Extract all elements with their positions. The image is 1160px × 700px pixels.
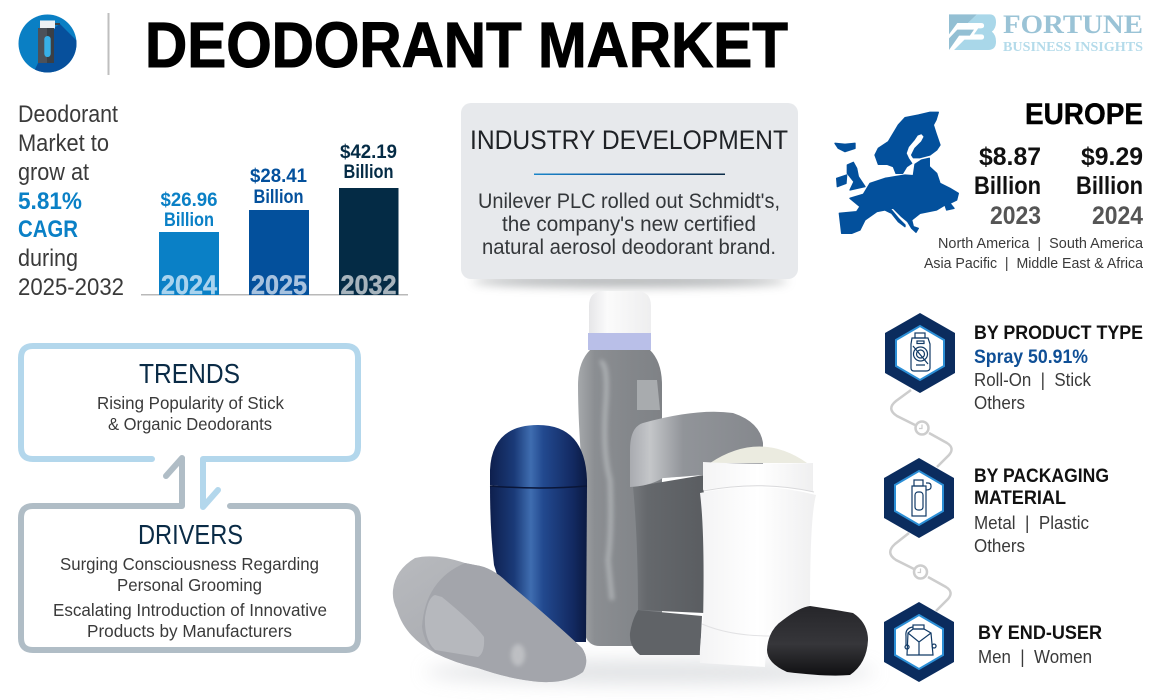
Europe 2024 value: 2024 [1092,202,1143,230]
grey lying roll-on [393,556,586,682]
industry development text: the company's new certified [502,212,756,236]
panel: industry development [461,103,798,287]
grey stick deodorant [630,412,763,655]
text block: CAGR statement: Market to [18,130,109,157]
icon: packaging material hexagon [884,458,954,538]
drivers text: Products by Manufacturers [87,621,292,641]
industry development text: Unilever PLC rolled out Schmidt's, [478,189,780,213]
industry development text [478,189,780,259]
industry development text: natural aerosol deodorant brand. [482,235,776,259]
text block: CAGR statement: during [18,245,78,272]
heading: drivers: DRIVERS [138,519,243,550]
product type list: Roll-On | Stick [974,369,1092,390]
connector: packaging to end-user [890,533,951,611]
header divider [108,13,110,75]
bar 2025: $28.41 [250,166,307,187]
Europe 2023 value: 2023 [990,202,1041,230]
Europe 2023 value: $8.87 [979,143,1041,171]
bar 2032: Billion [344,162,394,183]
bar 2025: 2025 [251,270,307,300]
Europe 2023 value: Billion [974,172,1041,200]
trends text [97,393,284,434]
heading: by packaging material [974,465,1109,509]
bar 2024: 2024 [161,270,217,300]
heading: trends: TRENDS [139,358,240,389]
Europe 2023 value [974,143,1041,230]
packaging material list [974,512,1089,556]
logo: Fortune Business Insights [949,10,1143,55]
other regions: North America | South America [938,235,1144,252]
Europe 2024 value [1076,143,1143,230]
panel: drivers [21,458,358,650]
map: Europe [835,112,958,233]
heading: by packaging material: MATERIAL [974,487,1066,509]
heading: industry development: INDUSTRY DEVELOPMENT [470,125,788,155]
panel: trends [21,346,358,507]
text block: CAGR statement: 2025-2032 [18,274,124,301]
logo: Fortune Business Insights: BUSINESS INSIGHTS [1003,40,1143,55]
bar 2025: Billion [254,187,304,208]
bar 2024: $26.96 [160,190,218,211]
icon: product type hexagon [885,313,955,393]
packaging material list: Metal | Plastic [974,512,1089,533]
photo illustration: deodorant products [393,291,875,684]
logo: Fortune Business Insights: FORTUNE [1003,10,1143,39]
blue roll-on [490,425,587,642]
bar chart: market size [141,142,408,300]
drivers text [53,554,327,641]
other regions: Asia Pacific | Middle East & Africa [924,255,1144,272]
text block: CAGR statement: CAGR [18,216,78,243]
highlight: spray share: Spray 50.91% [974,347,1088,368]
bar 2025 [249,166,309,300]
heading: by packaging material: BY PACKAGING [974,465,1109,487]
Europe 2024 value: Billion [1076,172,1143,200]
connector: product type to packaging [891,390,952,467]
bar 2032 [339,142,398,300]
text block: CAGR statement: 5.81% [18,188,82,215]
bar 2032: $42.19 [340,142,397,163]
heading: Europe: EUROPE [1025,98,1143,131]
drivers text: Personal Grooming [117,575,262,595]
bar 2024: Billion [164,210,214,231]
text block: CAGR statement: grow at [18,159,89,186]
icon: deodorant bottle in circle [18,14,76,72]
Europe 2024 value: $9.29 [1081,143,1143,171]
product type list [974,369,1092,413]
trends text: Rising Popularity of Stick [97,393,284,413]
bar 2032: 2032 [340,270,396,300]
trends text: & Organic Deodorants [108,414,272,434]
black cap [767,606,868,676]
spray can [578,291,662,646]
heading: by end-user: BY END-USER [978,622,1102,644]
drivers text: Escalating Introduction of Innovative [53,600,327,620]
text block: CAGR statement: Deodorant [18,101,118,128]
white stick deodorant [700,446,816,667]
other regions [924,235,1144,272]
product type list: Others [974,392,1025,413]
title: DEODORANT MARKET [145,9,788,81]
bar 2024 [159,190,219,300]
end-user list: Men | Women [978,646,1092,667]
drivers text: Surging Consciousness Regarding [60,554,319,574]
icon: end-user hexagon [884,602,954,682]
packaging material list: Others [974,535,1025,556]
text block: CAGR statement [18,101,124,301]
heading: by product type: BY PRODUCT TYPE [974,322,1143,344]
